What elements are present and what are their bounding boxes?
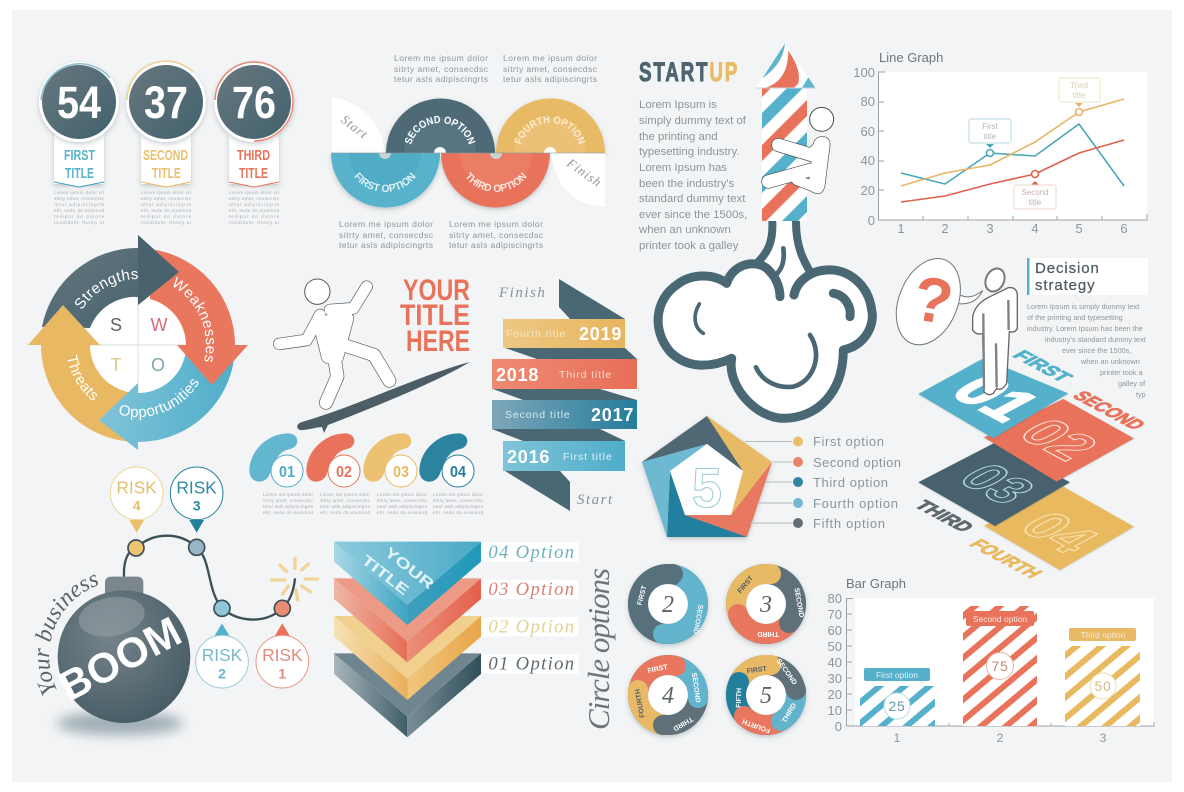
text block: startup paragraph: Lorem Ipsum has [639,162,727,174]
speech bubble [884,249,983,354]
text block: when an unknown [1080,357,1140,366]
heading: startup: STARTUP [639,57,739,87]
badge 76: 76 [232,77,276,128]
badge 37: elit, sedo do eiusmod [141,208,191,213]
labels: Strengths [75,270,138,308]
badge 37: SECOND [143,147,188,164]
bar: second title 2017 [492,400,637,429]
risk 3 [170,467,223,555]
badge 76: incididunt. Ruisly ut [229,220,280,225]
chart: circle option 3: THIRD [757,630,779,637]
panel: decision strategy [884,249,1150,581]
chart: circle option 3 [724,562,808,646]
text block: typ [1136,390,1146,399]
text block top two: tetur asls adipiscingrts [503,74,597,84]
badge 54: tempor do dolore [54,214,104,219]
option legend: Fifth option [813,516,886,531]
option legend: Third option [813,475,889,490]
chart: circle option 2: 2 [662,592,674,618]
text block: galley of [1118,379,1146,388]
chart: circle option 5: 5 [760,683,772,709]
blob 02 [306,433,371,515]
risk 2: RISK [202,645,243,665]
callout: first title [969,119,1011,156]
heading: circle options: Circle options [581,568,616,730]
text block: startup paragraph: printer took a galley [639,240,739,252]
step 02 [984,389,1150,482]
badge 37: sitrty amet, consectsc [141,196,192,201]
icon: figure climbing rocket [768,107,834,188]
x axis labels: 2 [941,221,949,236]
finish label: Finish [498,285,546,301]
option legend [745,434,902,531]
bar: first title 2016: 2016 [507,447,550,467]
step 04: 04 [1007,504,1113,561]
inner pentagon number [670,444,743,519]
bar: third option: 50 [1095,678,1111,694]
heading: your title here: TITLE [400,299,470,332]
text block: startup paragraph: Lorem Ipsum is [639,99,717,111]
chart: pentagon [642,416,902,537]
step 03: THIRD [909,498,978,535]
badge 54: 54 [57,77,101,128]
chart: circle option 5: FIFTH [736,688,743,708]
x axis labels [894,731,1107,745]
blob 03: tetur asls adipiscingrts [377,504,428,509]
chart title: Bar Graph [846,576,906,591]
blob 01: tetur asls adipiscingrts [263,504,314,509]
badge 54: incididunt. Ruisly ut [54,220,105,225]
risk 4: 4 [133,498,141,514]
risk 3: 3 [193,498,201,514]
text block bottom two: sitrty amet, consecdsc [449,230,544,240]
text block top one: Lorem me ipsum dolor [394,53,488,63]
step 01 [918,348,1077,438]
icon: surfer figure [279,279,389,403]
inner pentagon number: 5 [692,456,722,519]
blob 02: elit, sedo do eiusmod [320,510,370,515]
text block top two: sitrty amet, consecdsc [503,64,598,74]
blob 03: Lorem me ipsum dolor [377,492,427,497]
blob 04: elit, sedo do eiusmod [433,510,483,515]
text block bottom two: Lorem me ipsum dolor [449,219,543,229]
bar: third option [1065,628,1140,726]
step 03 [909,443,1070,535]
y axis labels: 40 [828,655,842,670]
center quadrants [86,293,190,397]
y axis labels [828,591,842,734]
series lines [901,99,1124,202]
text block top one: tetur asls adipiscingrts [394,74,488,84]
risk 2 [196,600,248,688]
labels: Threats [68,354,98,400]
blob 03: 03 [393,464,409,481]
option legend: First option [813,434,885,449]
center quadrants: W [150,315,168,335]
blob 02: tetur asls adipiscingrts [320,504,371,509]
labels [68,270,214,420]
chart: circle option 3: 3 [759,592,772,618]
y axis labels: 80 [828,591,842,606]
blob 01 [249,433,314,515]
callout: second title: title [1029,198,1042,207]
blob 02: sitrty amet, consecdsc [320,498,371,503]
layer 01 [334,653,481,737]
risk 1: 1 [278,665,286,681]
start label: Start [577,492,614,508]
y axis labels: 0 [868,213,875,228]
start petal: Start [338,112,371,142]
text block: startup paragraph: standard dummy text [639,193,746,205]
heading: your title here [400,274,470,358]
spark [272,558,318,600]
layer 03 [334,578,481,662]
y axis labels: 30 [828,671,842,686]
blob 04: 04 [450,464,466,481]
isometric steps [909,348,1150,581]
option labels: 03 Option [488,579,575,600]
y axis labels: 10 [828,703,842,718]
text block: industry. Lorem Ipsum has been the [1027,324,1143,333]
text block bottom one [339,219,434,250]
option labels [482,542,578,675]
text block: startup paragraph: been the industry's [639,178,735,190]
bar: fourth title 2019 [503,319,625,348]
step 02: SECOND [1067,389,1150,433]
badge 76: THIRD [237,147,270,164]
chart: layered chevrons [334,542,578,737]
third option [439,153,552,212]
panel: number badges [39,61,294,225]
text block: startup paragraph: ever since the 1500s, [639,209,747,221]
text block bottom two: tetur asls adipiscingrts [449,240,543,250]
heading: your business: Your business [34,574,98,696]
text block: ever since the 1500s, [1062,346,1131,355]
bar: first title 2016 [503,441,625,471]
ribbon folds [492,279,637,511]
badge 54: FIRST [64,147,95,164]
callout: second title: Second [1021,188,1049,197]
badge 76 [214,62,294,225]
callout: first title: title [984,132,997,141]
text block bottom one: sitrty amet, consecdsc [339,230,434,240]
rocket body [762,88,807,221]
text block: startup paragraph: when an unknown [638,224,731,236]
blob 04 [419,433,484,515]
chart: circle option 5: FIRST [746,666,768,675]
y axis labels: 70 [828,607,842,622]
blob 01: Lorem me ipsum dolor [263,492,313,497]
bomb body: BOOM [51,607,189,710]
chart title: Line Graph [879,50,943,65]
blob 03: sitrty amet, consecdsc [377,498,428,503]
callout: third title: title [1073,91,1086,100]
heading: your title here: YOUR [403,274,470,307]
first option: FIRST OPTION [354,172,416,192]
bar: first option: First option [876,670,918,680]
callout: third title: Third [1070,81,1088,90]
bar: second title 2017: 2017 [591,405,634,425]
heading: your title here: HERE [406,325,470,358]
layer 04 [334,542,481,625]
icon: exhaust cloud [658,222,872,418]
arrow: opportunities [99,350,235,450]
option labels: 02 Option [488,616,575,637]
risk 3: RISK [176,477,217,497]
text block: industry's standard dummy text [1045,335,1146,344]
step 01: 01 [936,366,1056,430]
callout: first title: First [982,122,999,131]
x axis labels: 4 [1031,221,1039,236]
chart: circle option 2: FIRST [637,584,649,606]
badge 54: sitrty amet, consectsc [54,196,105,201]
chart: circle option 3: SECOND [792,587,805,618]
layer 02 [334,616,481,700]
x axis labels: 3 [986,221,994,236]
speech bubble: ? [908,263,958,339]
fourth option [494,98,608,159]
y axis labels: 60 [828,623,842,638]
badge 54: elit, sedo do eiusmod [54,208,104,213]
blob 03 [363,433,428,515]
center quadrants: S [110,315,122,335]
badge 76: sitrty amet, consectsc [229,196,280,201]
arrow: weaknesses [150,249,248,385]
icon: standing figure [973,265,1017,395]
bar: third option: Third option [1081,630,1126,640]
panel: half circle timeline [328,53,608,250]
text block top one: sitrty amet, consecdsc [394,64,489,74]
bar: first option: 25 [889,698,905,714]
text block [1027,302,1146,399]
badge 76: elit, sedo do eiusmod [229,208,279,213]
layer 04: YOUR [381,545,437,593]
bar: first option [860,668,935,726]
y axis labels: 60 [861,124,875,139]
bar: third title 2018 [492,359,637,389]
x axis labels: 2 [997,731,1004,745]
chart: circle option 5 [724,653,808,737]
bar: fourth title 2019: 2019 [579,324,622,344]
y axis labels: 40 [861,153,875,168]
blob 01: elit, sedo do eiusmod [263,510,313,515]
arrow: strengths [42,235,179,328]
text block: startup paragraph: typesetting industry. [639,146,739,158]
badge 54 [39,62,119,225]
y axis labels [853,65,875,228]
text block: startup paragraph: the printing and [639,131,718,143]
chart: circle option 4: 4 [662,683,674,709]
first option [328,153,442,212]
third option: THIRD OPTION [466,172,527,192]
option labels: 04 Option [488,542,575,563]
bomb shadow [57,711,183,735]
text block top two: Lorem me ipsum dolor [503,53,597,63]
heading: Decision [1035,260,1100,277]
y axis labels: 20 [828,687,842,702]
illustration: surfer [279,279,470,433]
risk 4: RISK [116,477,157,497]
badge 37: Lorem ipsum dolor sit [141,190,192,195]
center quadrants: T [110,355,122,375]
bar: first title 2016: First title [563,451,613,463]
chart: circle option 5: FOURTH [742,717,771,734]
callout: second title [1014,170,1056,209]
badge 37: TITLE [152,165,181,182]
step 04: FOURTH [964,537,1046,581]
center quadrants: O [151,355,165,375]
x axis labels: 3 [1100,731,1107,745]
option legend: Fourth option [813,496,899,511]
chart: circle option 3: FIRST [737,574,755,595]
panel: ribbon timeline [492,279,637,511]
rocket cone [756,43,816,88]
chart: circle option 4 [628,655,708,735]
step 02: 02 [1005,411,1112,468]
chart: circle option 2: SECOND [691,604,704,635]
badge 37: 37 [144,77,188,128]
badge 37: tetur adipiscingrts [141,202,192,207]
layer 04: TITLE [358,553,412,599]
chart: circle option 4: THIRD [672,715,694,732]
risk 1: RISK [262,645,303,665]
bar: second option: Second option [973,614,1027,624]
blob 04: tetur asls adipiscingrts [433,504,484,509]
second option: SECOND OPTION [404,116,476,144]
bar: second option: 75 [992,658,1008,674]
risk 2: 2 [218,665,226,681]
risk 1 [256,600,309,688]
badge 37 [126,61,206,225]
blob 02: 02 [336,464,352,481]
bar: fourth title 2019: Fourth title [506,328,566,340]
second option [384,98,496,159]
text block bottom two [449,219,544,250]
chart: circle option 4: FIRST [647,664,669,675]
badge 37: incididunt. Ruisly ut [141,220,192,225]
bar: second title 2017: Second title [505,409,571,421]
heading [1027,258,1148,295]
text block: startup paragraph [638,99,747,252]
badge 37: tempor do dolore [141,214,191,219]
text block bottom one: Lorem me ipsum dolor [339,219,433,229]
bar: second option [963,606,1037,726]
panel: numbered blobs [249,433,484,515]
x axis labels [897,221,1128,236]
badge 76: tetur adipiscingrts [229,202,280,207]
heading: strategy [1035,277,1096,294]
y axis labels: 50 [828,639,842,654]
chart: circle option 5: SECOND [775,658,798,686]
option labels: 01 Option [488,654,575,675]
labels: Weaknesses [173,276,214,362]
x axis labels: 5 [1075,221,1083,236]
arrow: threats [28,305,138,442]
illustration: rocket [658,36,872,418]
labels: Opportunities [120,379,198,420]
callout: third title [1059,78,1100,116]
text block: Lorem Ipsum is simply dummy text [1027,302,1139,311]
badge 76: Lorem ipsum dolor sit [229,190,280,195]
y axis labels: 80 [861,94,875,109]
text block: printer took a [1100,368,1144,377]
step 03: 03 [945,456,1049,511]
badge 54: TITLE [65,165,94,182]
x axis labels: 1 [897,221,905,236]
chart: circle option 5: THIRD [781,702,798,724]
text block bottom one: tetur asls adipiscingrts [339,240,433,250]
arrow head: strengths [138,235,179,305]
fourth option: FOURTH OPTION [514,116,586,144]
badge 54: Lorem ipsum dolor sit [54,190,105,195]
start petal [332,97,385,153]
blob 01: 01 [279,464,295,481]
bar: third title 2018: 2018 [496,365,539,385]
finish petal: Finish [563,155,605,190]
chart: bar graph [828,576,1154,745]
y axis labels: 20 [861,183,875,198]
step 01: FIRST [1007,348,1077,385]
badge 76: TITLE [239,165,268,182]
chart: circle option 2 [628,564,708,644]
x axis labels: 1 [894,731,901,745]
y axis labels: 100 [853,65,875,80]
surfboard [297,362,470,433]
finish petal [551,153,605,207]
step 04 [964,487,1134,581]
chart: circle option 4: SECOND [690,672,701,703]
illustration: bomb and risks [34,466,320,743]
text block: startup paragraph: simply dummy text of [639,115,747,127]
badge 76: tempor do dolore [229,214,279,219]
bomb body [51,577,190,723]
risk 4 [110,467,163,556]
chart: circle option 4: FOURTH [635,688,647,718]
option legend: Second option [813,455,902,470]
y axis labels: 0 [835,719,842,734]
blob 01: sitrty amet, consecdsc [263,498,314,503]
pentagon segments [642,416,772,537]
blob 04: sitrty amet, consecdsc [433,498,484,503]
bar: third title 2018: Third title [559,369,612,381]
text block top one [394,53,489,84]
chart: line graph [853,50,1147,236]
x axis labels: 6 [1120,221,1128,236]
text block top two [503,53,598,84]
blob 03: elit, sedo do eiusmod [377,510,427,515]
blob 04: Lorem me ipsum dolor [433,492,483,497]
text block: of the printing and typesetting [1027,313,1123,322]
badge 54: tetur adipiscingrts [54,202,105,207]
chart: SWOT cycle [28,235,248,450]
blob 02: Lorem me ipsum dolor [320,492,370,497]
fuse [124,536,295,620]
